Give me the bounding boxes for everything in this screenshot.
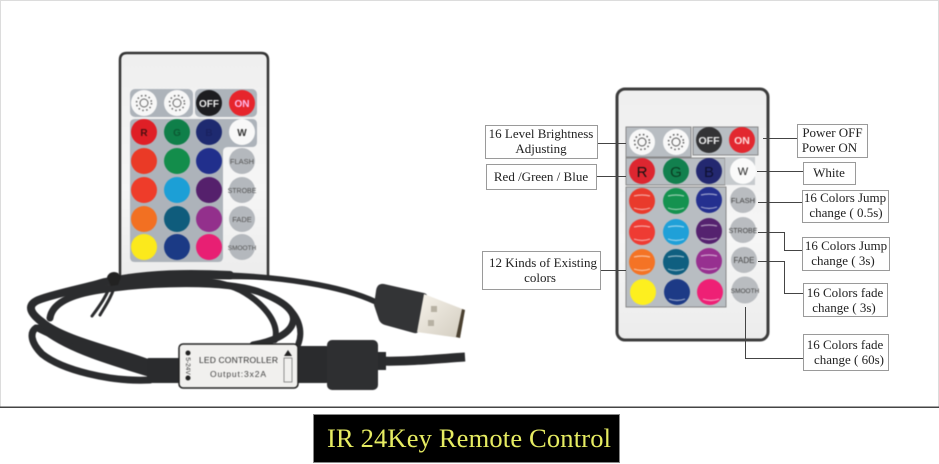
LED controller: 5-24V <box>184 357 191 375</box>
button panels <box>130 89 257 262</box>
connector ridges <box>378 352 386 370</box>
label: brightness <box>486 126 598 158</box>
label: existing colors: colors <box>524 270 556 285</box>
cable tails <box>92 280 112 316</box>
keys: SMOOTH <box>731 288 760 295</box>
buttons: OFF <box>199 99 219 110</box>
label: fade 3s <box>804 284 888 316</box>
keys: ON <box>734 135 750 147</box>
label: white <box>804 162 856 184</box>
coiled cable <box>31 274 465 380</box>
label: brightness: Adjusting <box>515 141 567 156</box>
photo: cable and USB controller <box>31 272 465 390</box>
grouped key outlines <box>626 127 758 307</box>
label: fade 3s: 16 Colors fade <box>807 285 883 300</box>
cable tie <box>107 272 121 286</box>
keys: W <box>738 166 749 178</box>
buttons: R <box>140 128 148 139</box>
label: jump 3s <box>802 238 890 270</box>
label: fade 3s: change ( 3s) <box>812 300 876 315</box>
title banner <box>314 414 620 462</box>
buttons: G <box>173 128 181 139</box>
white key backing <box>725 157 755 185</box>
label: existing colors <box>482 252 600 290</box>
LED controller: LED CONTROLLER <box>199 355 278 365</box>
remote body <box>120 53 268 278</box>
keys: G <box>670 164 682 181</box>
RGB connector <box>327 340 378 390</box>
label: jump 0.5s <box>802 190 888 222</box>
label: RGB <box>486 164 596 190</box>
keys: FADE <box>734 256 754 265</box>
buttons: STROBE <box>228 188 257 195</box>
buttons: FLASH <box>230 157 254 166</box>
USB plug <box>374 284 465 338</box>
remote outline <box>617 89 768 340</box>
buttons <box>131 90 257 260</box>
label: jump 3s: change ( 3s) <box>811 253 875 268</box>
label: power: Power ON <box>802 140 858 155</box>
LED controller <box>179 344 298 388</box>
title banner: IR 24Key Remote Control <box>327 423 611 453</box>
label: fade 60s <box>804 334 888 370</box>
photo: remote control <box>120 53 268 278</box>
keys: OFF <box>698 135 720 147</box>
label: fade 60s: change ( 60s) <box>814 352 884 367</box>
label: existing colors: 12 Kinds of Existing <box>489 255 597 270</box>
keys: FLASH <box>731 196 755 205</box>
label: power: Power OFF <box>802 125 863 140</box>
label: fade 60s: 16 Colors fade <box>807 337 883 352</box>
leader lines <box>596 138 803 358</box>
label: power <box>798 124 868 158</box>
keys <box>629 127 760 305</box>
keys: R <box>637 164 648 181</box>
controller strain reliefs <box>147 358 180 383</box>
USB lead <box>225 275 376 302</box>
label: RGB: Red /Green / Blue <box>494 169 588 184</box>
keys: STROBE <box>729 228 758 235</box>
label: white: White <box>813 165 845 180</box>
buttons: FADE <box>232 215 252 224</box>
key highlights <box>634 194 719 300</box>
buttons: ON <box>234 99 250 110</box>
buttons: B <box>205 128 213 139</box>
output lead <box>378 357 465 361</box>
label: jump 0.5s: change ( 0.5s) <box>809 205 883 220</box>
buttons: W <box>237 128 247 139</box>
label: jump 3s: 16 Colors Jump <box>805 238 887 253</box>
label: brightness: 16 Level Brightness <box>489 126 593 141</box>
diagram: annotated remote <box>482 89 890 370</box>
buttons: SMOOTH <box>228 245 257 252</box>
keys: B <box>704 164 714 181</box>
LED controller: Output:3x2A <box>210 369 266 379</box>
label: jump 0.5s: 16 Colors Jump <box>804 190 886 205</box>
